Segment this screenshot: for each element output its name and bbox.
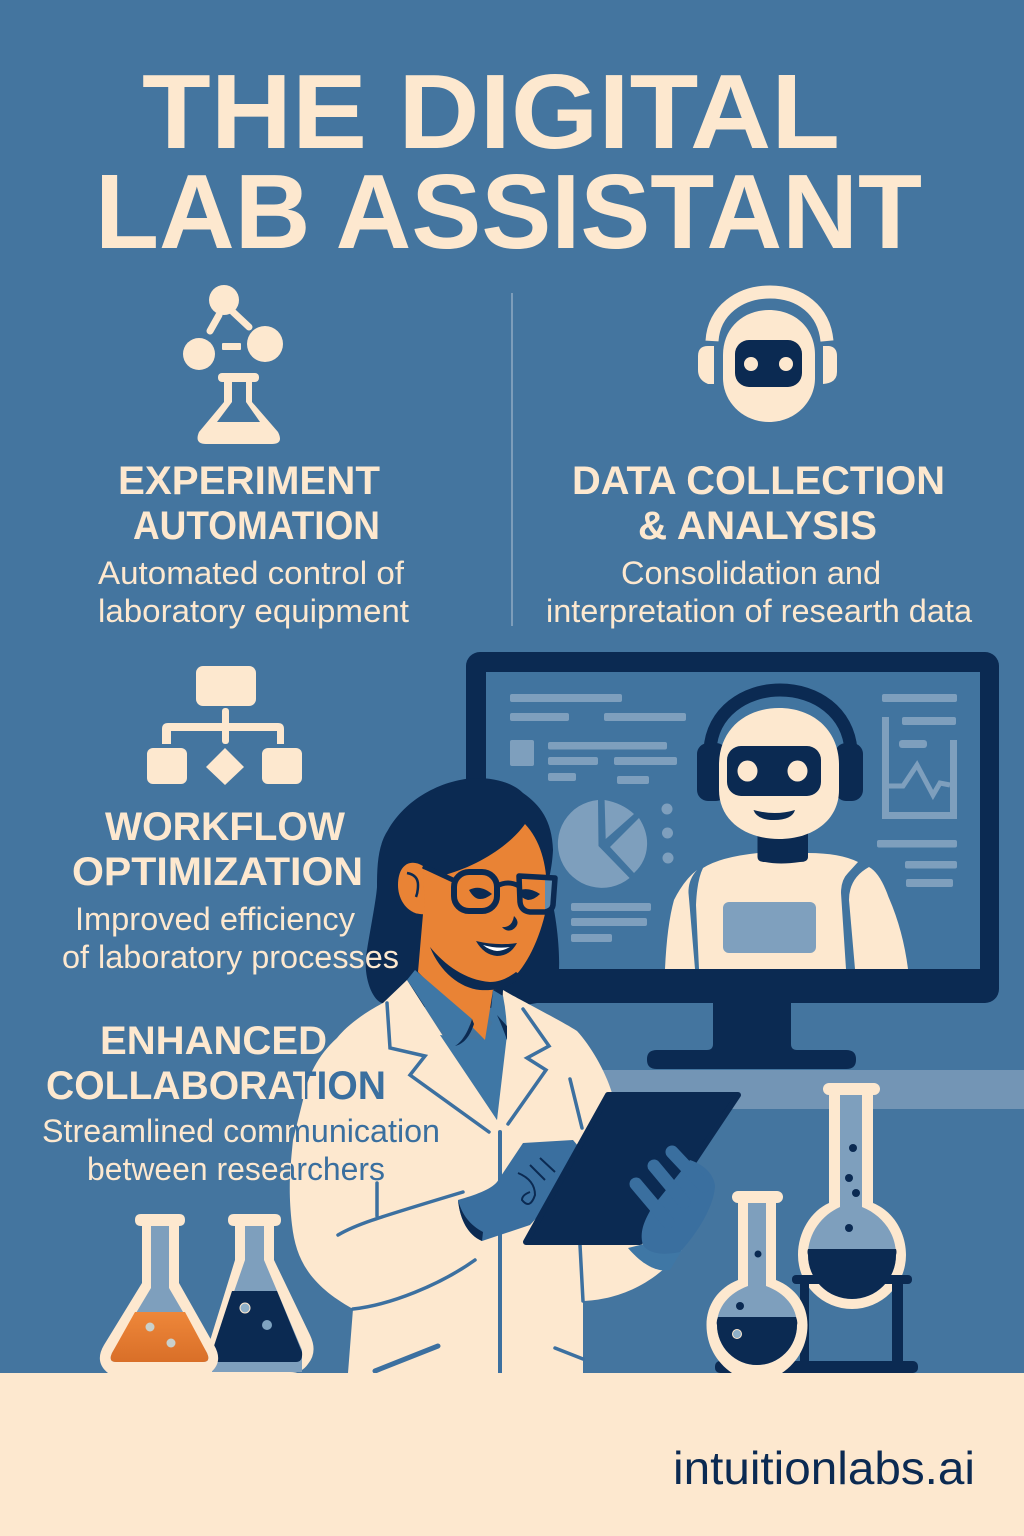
monitor illustration (466, 652, 999, 1069)
heading (72, 805, 363, 894)
navy conical flask (200, 1214, 314, 1373)
panel: data collection and analysis (546, 292, 972, 629)
description: laboratory equipment (98, 593, 409, 629)
hair (366, 778, 559, 1008)
footer band (0, 1373, 1024, 1536)
icon: flowchart (147, 666, 302, 785)
pie chart (558, 800, 647, 888)
heading: COLLABORATION (46, 1064, 386, 1108)
monitor stand (647, 1000, 856, 1069)
heading (118, 459, 380, 548)
robot smile (754, 810, 795, 820)
monitor frame (466, 652, 999, 1003)
glasses (423, 866, 557, 912)
footer brand: intuitionlabs.ai (673, 1442, 975, 1494)
heading: DATA COLLECTION (572, 459, 945, 503)
heading: EXPERIMENT (118, 459, 380, 503)
lab coat (290, 980, 682, 1373)
robot on screen (665, 690, 908, 969)
robot visor (727, 746, 821, 796)
shelf band (590, 1070, 1024, 1109)
robot body (696, 853, 858, 969)
short round flask (706, 1191, 808, 1373)
robot headset (710, 690, 851, 750)
panel: enhanced collaboration (42, 1019, 440, 1187)
description: Automated control of (98, 555, 404, 591)
heading (572, 459, 945, 548)
title (95, 53, 922, 271)
tall round flask (798, 1083, 906, 1309)
mouth (476, 941, 517, 956)
description: Consolidation and (621, 555, 881, 591)
screen line chart (877, 694, 957, 887)
eyes (469, 888, 540, 900)
heading: AUTOMATION (133, 504, 380, 548)
right glove (628, 1152, 715, 1270)
description: between researchers (87, 1151, 385, 1187)
description: interpretation of researth data (546, 593, 972, 629)
flask stand (715, 1275, 918, 1373)
scientist illustration (290, 778, 738, 1373)
heading: & ANALYSIS (638, 504, 877, 548)
heading: WORKFLOW (105, 805, 345, 849)
left conical flasks (100, 1214, 314, 1373)
screen dashboard left (510, 694, 686, 942)
divider line (511, 293, 513, 626)
robot neck (758, 830, 808, 864)
coat lapels and seams (338, 1003, 583, 1373)
right round flasks (706, 1083, 918, 1373)
description (62, 901, 399, 975)
description: Improved efficiency (75, 901, 355, 937)
orange conical flask (100, 1214, 218, 1373)
description (98, 555, 409, 629)
description (42, 1113, 440, 1187)
nose (502, 916, 518, 931)
description: Streamlined communication (42, 1113, 440, 1149)
icon: robot head with headset (698, 292, 837, 422)
monitor screen (486, 672, 980, 969)
panel: workflow optimization (62, 666, 399, 975)
jaw shadow (430, 947, 522, 990)
title: THE DIGITAL (142, 53, 840, 171)
description: of laboratory processes (62, 939, 399, 975)
tablet (526, 1095, 738, 1242)
robot arms (665, 867, 908, 969)
panel: experiment automation (98, 285, 409, 629)
icon: molecule and flask (183, 285, 283, 444)
description (546, 555, 972, 629)
face and neck (418, 824, 547, 1040)
heading: OPTIMIZATION (72, 850, 363, 894)
heading: ENHANCED (100, 1019, 327, 1063)
robot chest panel (723, 902, 816, 953)
robot head (719, 708, 839, 839)
shirt (407, 970, 507, 1120)
heading (46, 1019, 386, 1108)
ear (398, 863, 425, 914)
title: LAB ASSISTANT (95, 153, 922, 271)
left glove (458, 1140, 590, 1241)
